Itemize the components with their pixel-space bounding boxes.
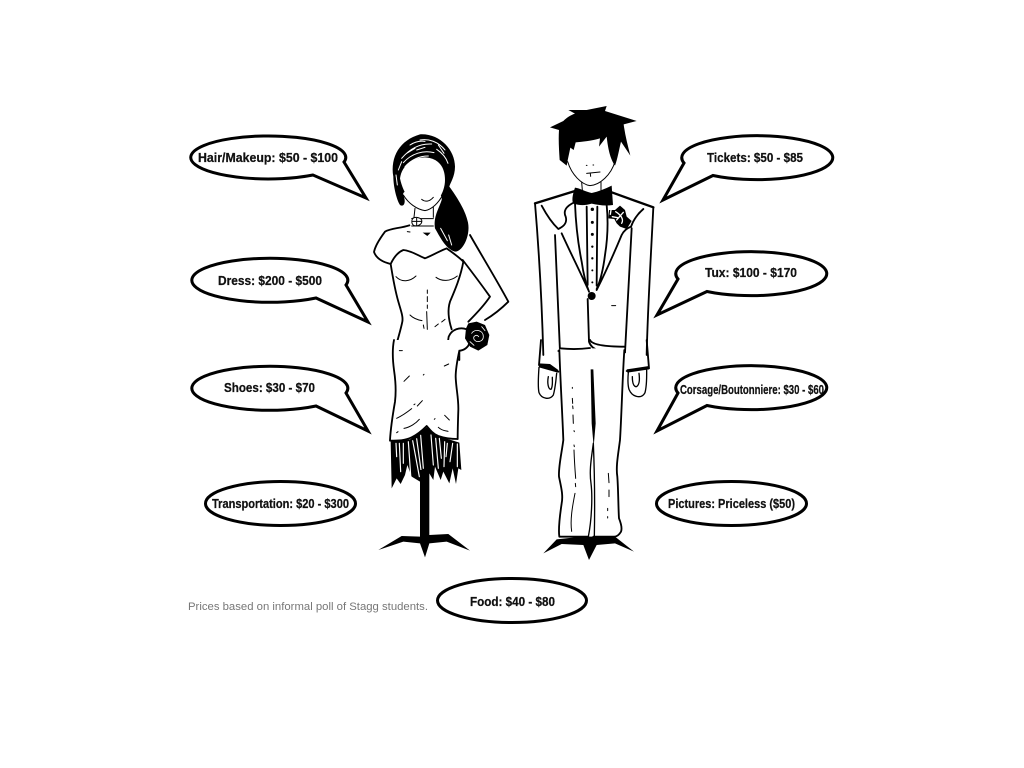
stand base (543, 537, 634, 560)
callout: dress: Dress: $200 - $500 (218, 273, 322, 288)
trouser crease marks (571, 387, 609, 531)
callout: tux (657, 252, 827, 315)
bow tie (572, 186, 613, 206)
lapels (542, 202, 589, 292)
callout: transportation: Transportation: $20 - $300 (212, 496, 349, 511)
callout: dress (192, 258, 368, 322)
man lower body (538, 340, 649, 560)
hair (550, 106, 637, 166)
source note: Prices based on informal poll of Stagg students. (188, 601, 428, 613)
jacket button (588, 292, 596, 300)
torso (391, 264, 403, 360)
stand (378, 470, 470, 557)
hemline (390, 426, 458, 441)
face (567, 145, 617, 186)
woman upper body (374, 134, 508, 360)
callout: pictures (656, 482, 806, 526)
callout: shoes (192, 366, 368, 431)
arm (470, 235, 508, 320)
facial features (586, 165, 600, 176)
figure: man in tuxedo on stand (535, 106, 653, 560)
boutonniere (608, 206, 632, 229)
callout: food: Food: $40 - $80 (470, 594, 555, 609)
jacket hem and sleeves (539, 340, 649, 372)
callout: transportation (206, 482, 356, 526)
jacket front edge (558, 299, 625, 353)
neck (582, 182, 601, 190)
callout: tickets: Tickets: $50 - $85 (707, 150, 803, 165)
corsage (465, 322, 489, 351)
face (400, 157, 445, 211)
trousers (559, 350, 624, 537)
callout: hair and makeup: Hair/Makeup: $50 - $100 (198, 150, 338, 165)
fringe (391, 427, 461, 488)
hair (393, 134, 469, 252)
man upper body (535, 106, 653, 355)
callout: tickets (663, 136, 833, 200)
skirt sides (390, 340, 396, 440)
callout: corsage and boutonniere (657, 366, 827, 431)
hands (538, 367, 557, 398)
shirt front (587, 207, 597, 286)
neck and choker (412, 207, 433, 226)
callout: tux: Tux: $100 - $170 (705, 265, 797, 280)
hand (448, 328, 469, 351)
jacket outline (535, 191, 653, 207)
dress details (397, 351, 449, 433)
callout: pictures: Pictures: Priceless ($50) (668, 496, 795, 511)
callout: food (438, 578, 586, 622)
bust and waist details (396, 276, 457, 351)
callout: corsage and boutonniere: Corsage/Boutonniere: $30 - $60 (680, 382, 824, 397)
callout: hair and makeup (191, 136, 366, 198)
callout: shoes: Shoes: $30 - $70 (224, 380, 315, 395)
figure: woman in dress on mannequin stand (374, 134, 508, 557)
shirt buttons (591, 208, 594, 283)
woman lower body and stand (378, 340, 470, 557)
shoulders, arm stub and neckline (374, 225, 463, 264)
